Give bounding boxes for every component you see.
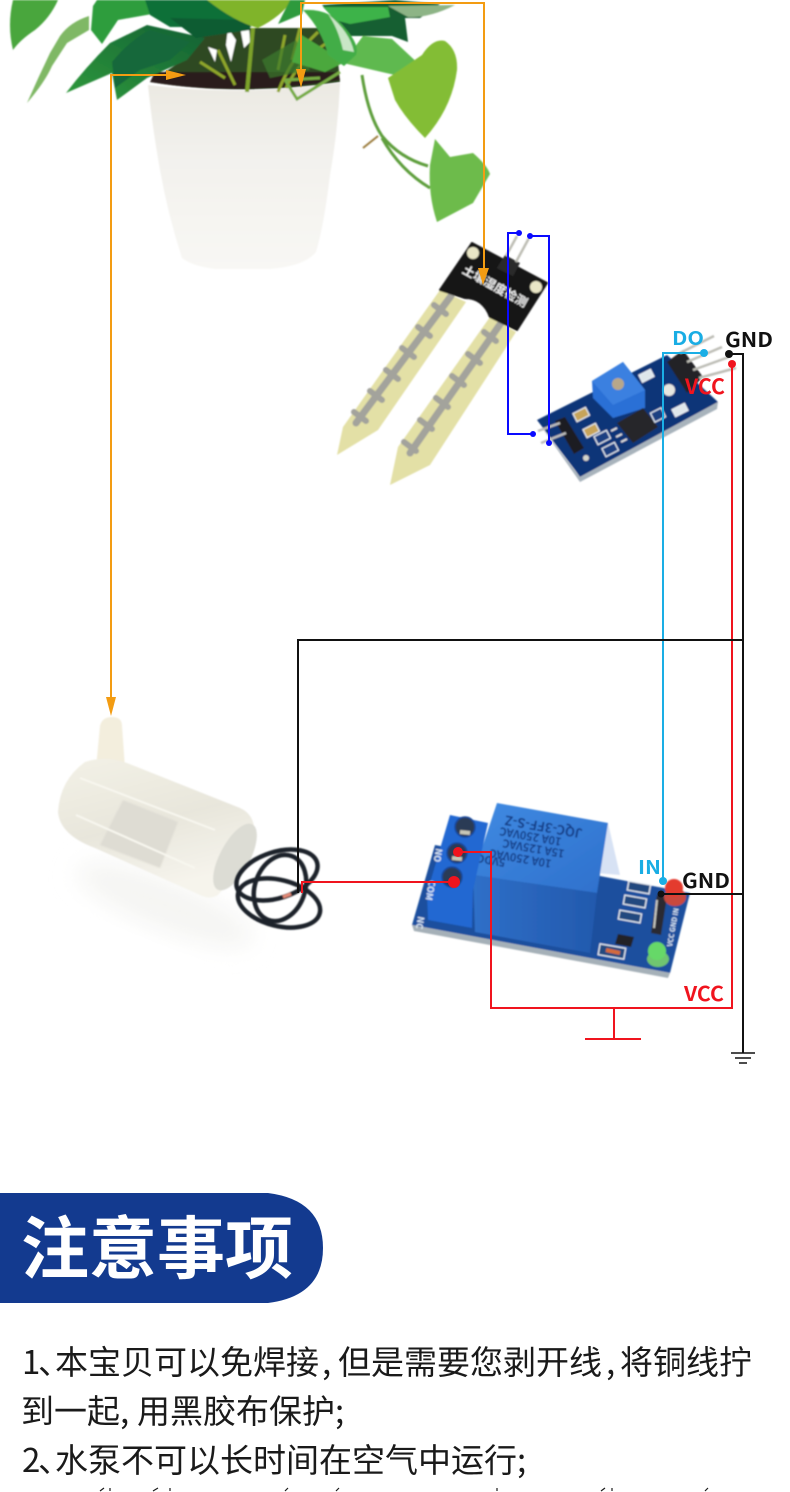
leaf top centre yellow green <box>207 0 292 28</box>
red led <box>664 879 686 906</box>
relay small labels: VCC GND IN <box>665 907 682 949</box>
notes text block: , <box>120 1385 129 1433</box>
notes text block: 用黑胶布保护 <box>137 1385 335 1433</box>
soil moisture probe <box>337 236 547 485</box>
relay markings: 10A 250VAC <box>498 823 563 850</box>
cyan signal wire DO to IN <box>659 349 708 885</box>
leaf top left <box>10 0 58 50</box>
chip <box>617 408 658 443</box>
pump end cap <box>204 817 266 897</box>
label VCC sensor: VCC <box>684 371 725 401</box>
heading banner: 注意事项: 注意事项 <box>21 1194 293 1293</box>
probe prongs <box>337 290 466 455</box>
relay module: NO <box>431 847 446 863</box>
relay markings: 15A 125VAC <box>501 835 566 862</box>
mounting hole <box>663 384 675 396</box>
label GND relay: GND <box>682 865 730 894</box>
relay markings: 10A 250VAC <box>488 845 553 872</box>
terminal block <box>427 815 488 928</box>
relay body front <box>473 875 597 953</box>
relay markings: 5VDC <box>476 850 507 871</box>
blue probe wires <box>508 230 552 446</box>
hanging vines <box>362 75 430 188</box>
plant pot <box>148 83 340 269</box>
label IN: IN <box>638 853 661 880</box>
notes text block: 但是需要您剥开线 <box>338 1336 602 1384</box>
notes text block: ; <box>517 1434 526 1482</box>
relay body top <box>473 803 608 893</box>
probe head text: 土壤湿度检测 <box>460 261 531 311</box>
relay markings <box>476 811 584 872</box>
lower leaf <box>430 139 490 222</box>
notes text block: 2 <box>22 1434 40 1482</box>
relay module: COM <box>423 879 439 902</box>
red VCC wire <box>453 360 736 1039</box>
leaf upper left <box>91 0 152 44</box>
probe traces <box>354 296 501 453</box>
leaf narrow left <box>27 16 89 103</box>
notes text block: , <box>322 1336 331 1384</box>
potted plant photo <box>10 0 490 269</box>
relay header pins <box>651 895 667 935</box>
potentiometer <box>592 362 645 418</box>
heart leaf <box>388 41 457 138</box>
green led <box>647 942 669 967</box>
notes text block: 将铜线拧 <box>620 1336 752 1384</box>
pump wire coil <box>230 840 325 935</box>
leaf large dark left <box>66 25 205 100</box>
notes text block: 到一起 <box>21 1385 120 1433</box>
soil and stems <box>150 27 340 92</box>
notes text block: 水泵不可以长时间在空气中运行 <box>55 1434 517 1482</box>
leaves top centre dark <box>145 0 252 27</box>
black ground wires <box>298 350 743 1053</box>
leaf variegated right <box>303 10 357 66</box>
notes text block: 本宝贝可以免焊接 <box>55 1336 319 1384</box>
pump shadow <box>68 847 262 963</box>
leaf stem region green <box>278 0 305 24</box>
left header <box>555 417 584 454</box>
red pump to relay wire <box>302 876 460 893</box>
probe connector and pins <box>497 236 529 276</box>
label VCC relay: VCC <box>683 978 724 1007</box>
label GND sensor: GND <box>725 324 773 353</box>
relay markings: JQC-3FF-S-Z <box>503 811 584 844</box>
notes text block: ; <box>335 1385 344 1433</box>
label DO: DO <box>672 324 704 351</box>
right header and pins <box>667 336 736 393</box>
relay board <box>412 845 690 973</box>
relay side face <box>597 823 620 875</box>
sensor control module <box>537 336 736 482</box>
module board <box>537 355 718 477</box>
notes text block: , <box>606 1336 615 1384</box>
terminal screws <box>442 817 475 887</box>
pump nozzle <box>96 717 125 768</box>
twig <box>363 136 378 148</box>
notes text block: 、 <box>38 1434 71 1482</box>
relay module <box>412 803 690 978</box>
leaf large light right <box>343 36 437 81</box>
leaves top right dark <box>322 0 440 42</box>
water pump <box>58 717 266 963</box>
small components <box>573 369 688 457</box>
orange signal line right <box>296 3 489 285</box>
vine at pot rim <box>285 72 340 99</box>
notes text block: 、 <box>38 1336 71 1384</box>
ground symbol <box>731 1053 755 1063</box>
notes text block <box>21 1336 752 1491</box>
relay small components <box>598 881 651 959</box>
orange water tube left <box>106 70 186 716</box>
notes text block: 1 <box>22 1336 40 1384</box>
terminal labels: NC <box>413 915 428 930</box>
probe mounting holes <box>467 247 479 259</box>
probe black head <box>440 243 547 330</box>
pump body <box>58 759 254 898</box>
